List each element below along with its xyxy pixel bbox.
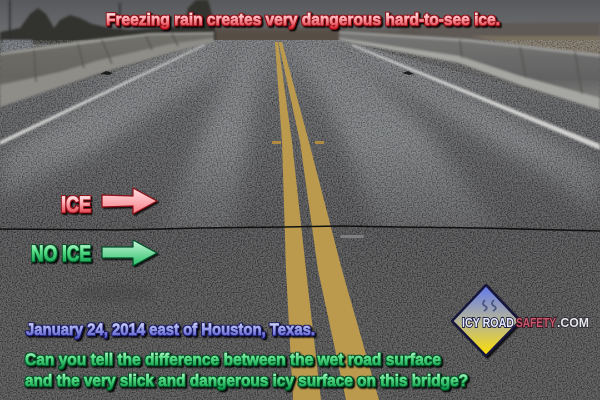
left concrete barrier bbox=[0, 32, 214, 107]
centre-right ice band bbox=[304, 52, 491, 228]
question line 1: Can you tell the difference between the wet road surface bbox=[25, 350, 441, 369]
wet patch bbox=[75, 284, 155, 302]
logo wordmark: SAFETY bbox=[516, 316, 557, 330]
double yellow centre lines bbox=[275, 42, 379, 400]
ice bands on road, above the crack bbox=[0, 44, 600, 240]
road reflectors bbox=[272, 141, 324, 144]
far-left ice band bbox=[0, 52, 216, 196]
debris on shoulders bbox=[100, 71, 414, 75]
logo diamond sign bbox=[452, 285, 520, 356]
centre-left ice band bbox=[167, 53, 260, 228]
arrow: ICE bbox=[102, 188, 157, 214]
logo: Icy Road Safety bbox=[452, 285, 589, 356]
right concrete barrier bbox=[339, 31, 600, 110]
arrow: NO ICE bbox=[102, 240, 157, 266]
label: ICE: ICE bbox=[61, 192, 91, 217]
sky bbox=[0, 0, 600, 46]
pavement crack bbox=[0, 226, 600, 231]
white edge lines bbox=[0, 45, 600, 150]
question line 2: and the very slick and dangerous icy surface on this bridge? bbox=[25, 371, 468, 390]
label: NO ICE: NO ICE bbox=[31, 241, 91, 266]
far-right ice band bbox=[370, 57, 600, 206]
title: Freezing rain creates very dangerous hard-to-see ice. bbox=[106, 10, 500, 29]
icon: skid marks bbox=[483, 300, 496, 311]
ice patch bbox=[340, 235, 364, 238]
logo wordmark: ICY ROAD bbox=[462, 316, 514, 330]
date and location: January 24, 2014 east of Houston, Texas. bbox=[26, 320, 315, 339]
question text bbox=[25, 350, 468, 390]
distant treeline bbox=[0, 0, 600, 58]
logo wordmark: .COM bbox=[557, 316, 589, 330]
